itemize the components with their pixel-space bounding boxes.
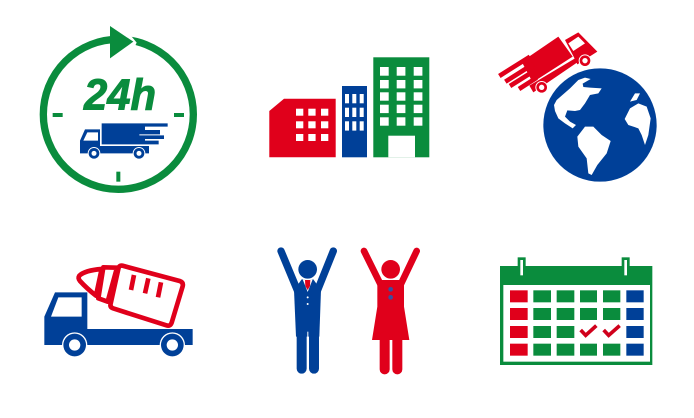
icon: 24h delivery clock	[43, 26, 193, 189]
24h label: 24h	[83, 71, 156, 119]
icon: truck over globe	[499, 32, 657, 182]
icon: people cheering	[281, 251, 417, 373]
ring gap	[110, 30, 137, 50]
clock ring	[43, 39, 193, 189]
hour ticks	[53, 113, 184, 182]
blue building	[342, 86, 367, 157]
icon: truck carrying bottle	[44, 266, 193, 358]
calendar frame	[500, 266, 652, 365]
binder rings	[518, 257, 630, 275]
globe	[543, 68, 657, 182]
icon: buildings	[269, 57, 429, 157]
man	[281, 251, 333, 373]
red building	[269, 99, 336, 157]
green building	[373, 57, 429, 157]
truck	[44, 292, 193, 358]
woman	[364, 251, 417, 369]
ring arrowhead	[110, 26, 133, 58]
day cells	[510, 290, 644, 356]
icon: calendar	[500, 257, 652, 365]
red truck	[499, 32, 597, 94]
dress buttons	[388, 287, 393, 300]
blue truck	[80, 123, 168, 160]
tie	[303, 279, 313, 292]
check marks	[581, 326, 620, 335]
bottle	[79, 266, 183, 326]
